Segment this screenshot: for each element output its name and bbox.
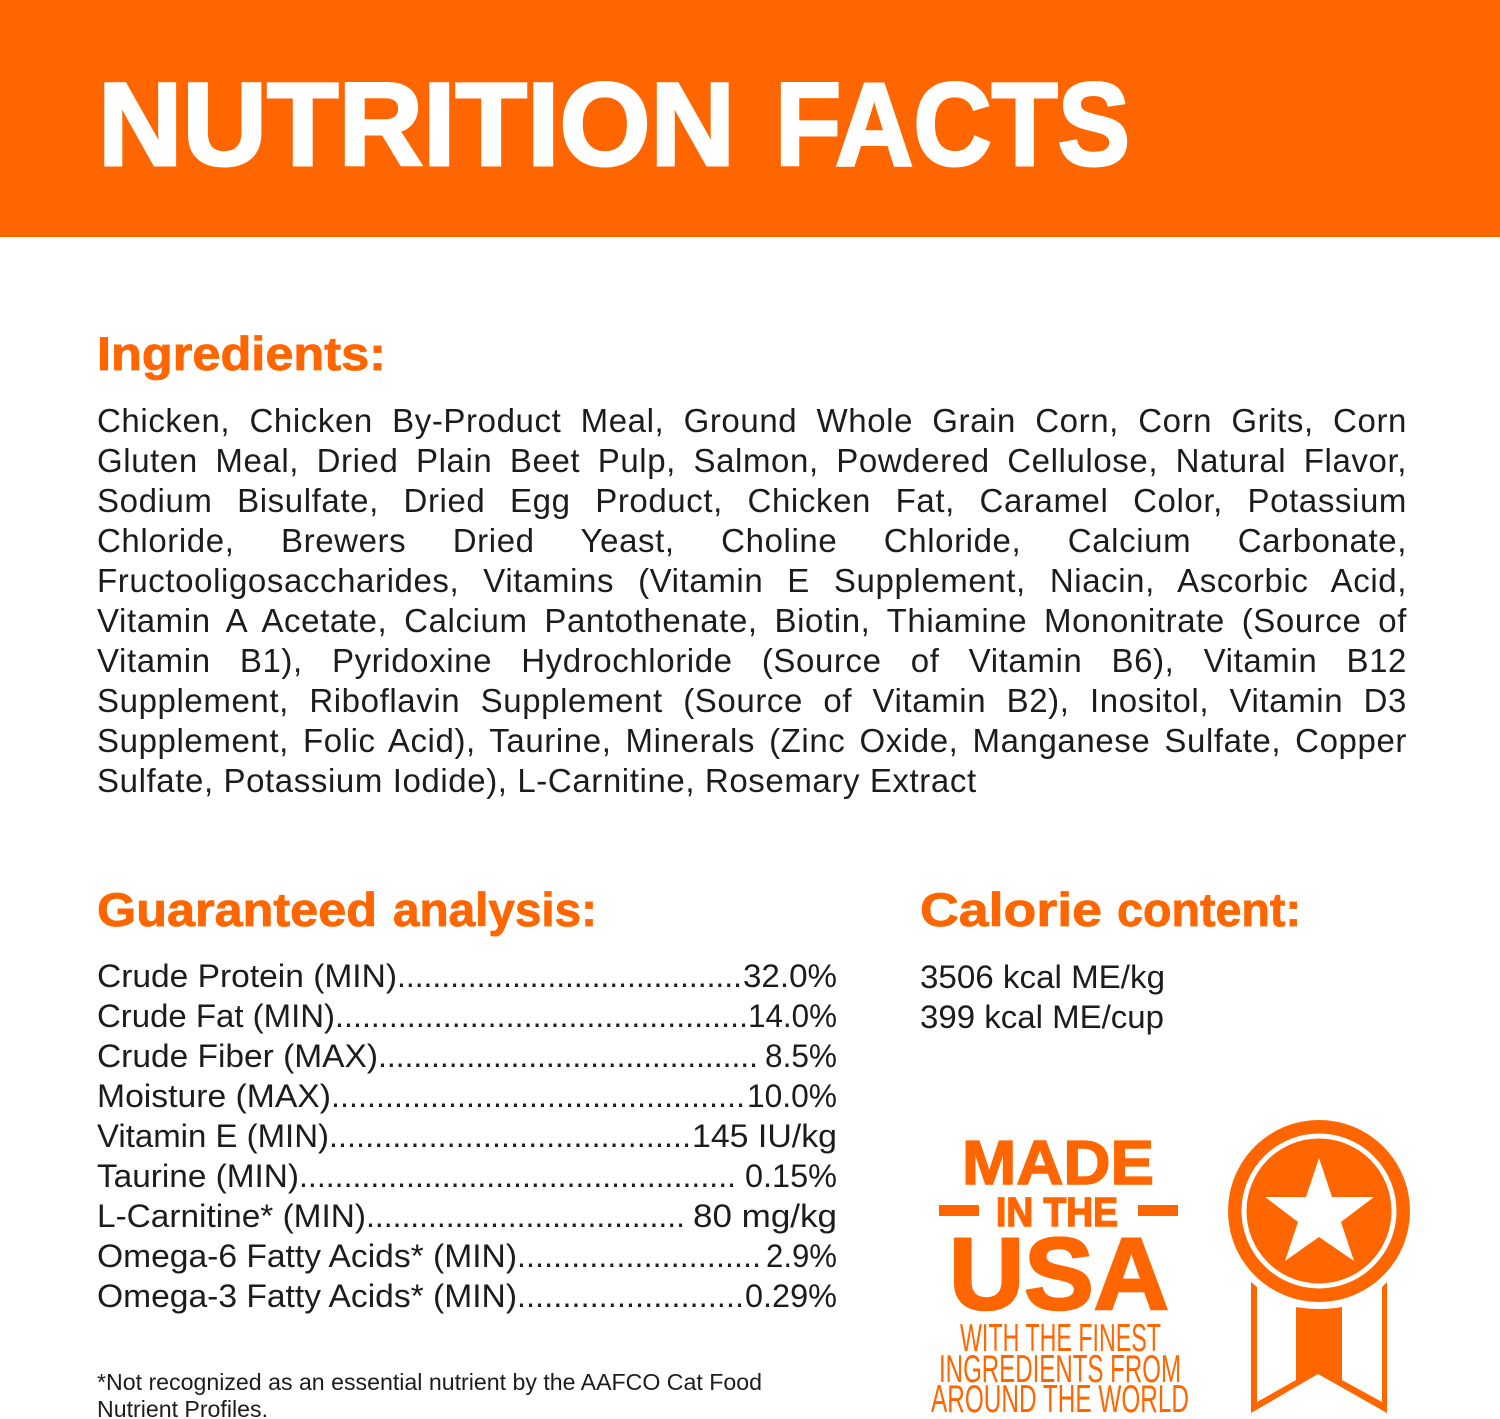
guaranteed analysis table: .............................................. xyxy=(331,1078,745,1114)
guaranteed analysis table: 32.0% xyxy=(743,958,837,994)
heading: guaranteed analysis xyxy=(97,883,597,936)
guaranteed analysis table: 0.29% xyxy=(745,1278,837,1314)
ingredients list: Vitamin A Acetate, Calcium Pantothenate, Biotin, Thiamine Mononitrate (Source of xyxy=(97,602,1407,639)
guaranteed analysis table: ........................................... xyxy=(378,1038,758,1074)
footnote xyxy=(97,1369,762,1419)
guaranteed analysis table: Omega-3 Fatty Acids* (MIN) xyxy=(97,1278,517,1314)
guaranteed analysis table: Vitamin E (MIN) xyxy=(97,1118,329,1154)
made in the usa text: IN THE xyxy=(996,1189,1118,1235)
ingredients list: Supplement, Folic Acid), Taurine, Minerals (Zinc Oxide, Manganese Sulfate, Copper xyxy=(97,722,1407,759)
calorie values xyxy=(920,959,1165,1035)
guaranteed analysis table xyxy=(97,958,837,1314)
heading: guaranteed analysis: Guaranteed xyxy=(97,883,377,936)
guaranteed analysis table: ....................................... xyxy=(397,958,742,994)
ingredients list: Gluten Meal, Dried Plain Beet Pulp, Salmon, Powdered Cellulose, Natural Flavor, xyxy=(97,442,1407,479)
made in the usa text: MADE xyxy=(962,1129,1154,1198)
heading: calorie content xyxy=(920,883,1301,936)
heading: calorie content: Calorie xyxy=(920,883,1102,936)
guaranteed analysis table: ................................................. xyxy=(299,1158,736,1194)
guaranteed analysis table: L-Carnitine* (MIN) xyxy=(97,1198,366,1234)
guaranteed analysis table: Crude Fat (MIN) xyxy=(97,998,335,1034)
calorie values: 3506 kcal ME/kg xyxy=(920,959,1165,995)
made in the usa text: INGREDIENTS FROM xyxy=(939,1348,1181,1391)
guaranteed analysis table: 8.5% xyxy=(765,1038,837,1074)
title xyxy=(98,59,1130,191)
footnote: *Not recognized as an essential nutrient by the AAFCO Cat Food xyxy=(97,1369,762,1395)
ingredients list: Chicken, Chicken By-Product Meal, Ground Whole Grain Corn, Corn Grits, Corn xyxy=(97,402,1407,439)
guaranteed analysis table: .................................... xyxy=(366,1198,685,1234)
made in the usa text: WITH THE FINEST xyxy=(960,1317,1161,1360)
title: FACTS xyxy=(775,59,1130,191)
ingredients list: Sodium Bisulfate, Dried Egg Product, Chicken Fat, Caramel Color, Potassium xyxy=(97,482,1407,519)
heading: guaranteed analysis: analysis: xyxy=(393,883,597,936)
ingredients list: Chloride, Brewers Dried Yeast, Choline Chloride, Calcium Carbonate, xyxy=(97,522,1407,559)
guaranteed analysis table: 80 mg/kg xyxy=(693,1198,837,1234)
guaranteed analysis table: 14.0% xyxy=(748,998,837,1034)
guaranteed analysis table: Omega-6 Fatty Acids* (MIN) xyxy=(97,1238,517,1274)
ingredients list: Fructooligosaccharides, Vitamins (Vitamin E Supplement, Niacin, Ascorbic Acid, xyxy=(97,562,1407,599)
guaranteed analysis table: ........................................ xyxy=(329,1118,691,1154)
title: NUTRITION xyxy=(98,59,735,191)
calorie values: 399 kcal ME/cup xyxy=(920,999,1164,1035)
guaranteed analysis table: 2.9% xyxy=(766,1238,837,1274)
guaranteed analysis table: ......................... xyxy=(517,1278,744,1314)
ingredients list: Supplement, Riboflavin Supplement (Source of Vitamin B2), Inositol, Vitamin D3 xyxy=(97,682,1407,719)
guaranteed analysis table: .............................................. xyxy=(335,998,748,1034)
guaranteed analysis table: Moisture (MAX) xyxy=(97,1078,331,1114)
icon: award ribbon with star xyxy=(1228,1120,1410,1413)
guaranteed analysis table: 145 IU/kg xyxy=(692,1118,837,1154)
guaranteed analysis table: 0.15% xyxy=(745,1158,837,1194)
ingredients list xyxy=(97,402,1407,799)
guaranteed analysis table: Crude Protein (MIN) xyxy=(97,958,397,994)
heading: ingredients: Ingredients: xyxy=(97,327,386,380)
made in the usa text xyxy=(931,1129,1189,1419)
ingredients list: Vitamin B1), Pyridoxine Hydrochloride (Source of Vitamin B6), Vitamin B12 xyxy=(97,642,1407,679)
heading: calorie content: content: xyxy=(1117,883,1301,936)
guaranteed analysis table: 10.0% xyxy=(747,1078,837,1114)
guaranteed analysis table: Taurine (MIN) xyxy=(97,1158,299,1194)
made in the usa text: USA xyxy=(949,1217,1169,1331)
guaranteed analysis table: Crude Fiber (MAX) xyxy=(97,1038,378,1074)
guaranteed analysis table: ........................... xyxy=(517,1238,761,1274)
ingredients list: Sulfate, Potassium Iodide), L-Carnitine, Rosemary Extract xyxy=(97,762,977,799)
header banner xyxy=(0,0,1500,237)
